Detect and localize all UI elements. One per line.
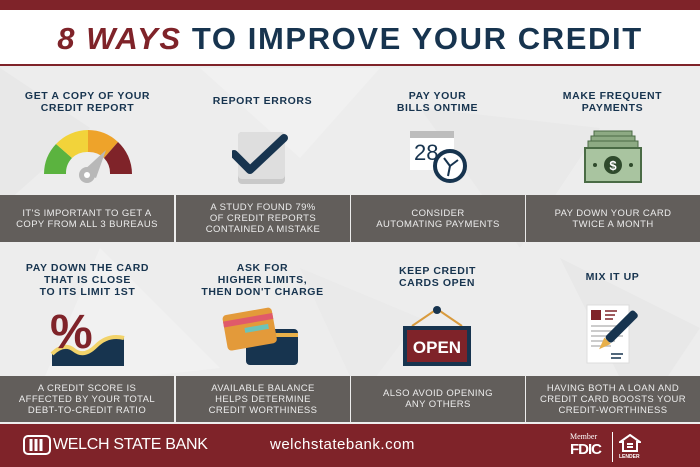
caption 8: CREDIT-WORTHINESS (558, 404, 668, 416)
icon: calendar clock (410, 131, 467, 183)
heading 5 (26, 262, 149, 298)
icon: percent chart (50, 308, 124, 366)
icon: calendar clock: 28 (414, 140, 438, 165)
heading 5: TO ITS LIMIT 1ST (40, 286, 135, 298)
caption 3 (351, 195, 525, 242)
title band (0, 10, 700, 66)
caption 2: CONTAINED A MISTAKE (206, 224, 320, 235)
heading 4 (563, 90, 662, 114)
caption 6: CREDIT WORTHINESS (209, 404, 317, 416)
caption 7 (351, 376, 525, 422)
icon: cash (584, 130, 642, 183)
caption 6 (176, 376, 350, 422)
icon: open sign (403, 306, 471, 366)
heading 8: MIX IT UP (586, 271, 639, 283)
caption 3: CONSIDER (411, 208, 465, 218)
logo: Welch State Bank: WELCH STATE BANK (53, 436, 208, 453)
caption 8: CREDIT CARD BOOSTS YOUR (540, 394, 686, 404)
icon: document pen (586, 304, 638, 364)
icon: credit cards (222, 308, 298, 365)
background pattern (0, 68, 700, 424)
heading 3: BILLS ONTIME (397, 102, 478, 114)
heading 7: CARDS OPEN (399, 277, 475, 289)
FDIC / equal housing: FDIC (570, 441, 601, 458)
caption 6: AVAILABLE BALANCE (211, 382, 315, 394)
title: 8 WAYS TO IMPROVE YOUR CREDIT (57, 21, 643, 56)
caption 5: AFFECTED BY YOUR TOTAL (19, 394, 155, 404)
caption 4 (526, 195, 700, 242)
top bar (0, 0, 700, 10)
icon: cash: $ (609, 158, 617, 173)
heading 1 (25, 90, 150, 114)
heading 5: THAT IS CLOSE (44, 274, 131, 286)
heading 2: REPORT ERRORS (213, 95, 312, 107)
heading 3 (397, 90, 478, 114)
caption 2 (176, 195, 350, 242)
caption 3: AUTOMATING PAYMENTS (376, 218, 500, 230)
caption 1: IT'S IMPORTANT TO GET A (22, 208, 152, 218)
caption 1: COPY FROM ALL 3 BUREAUS (16, 218, 158, 230)
caption 7: ANY OTHERS (405, 399, 471, 410)
caption 2: OF CREDIT REPORTS (210, 213, 316, 224)
heading 6: HIGHER LIMITS, (218, 274, 307, 286)
caption 5: A CREDIT SCORE IS (38, 382, 136, 394)
heading 6: ASK FOR (237, 262, 288, 274)
heading 4: MAKE FREQUENT (563, 90, 662, 102)
FDIC / equal housing: LENDER (619, 454, 640, 460)
heading 6 (201, 262, 324, 298)
heading 7: KEEP CREDIT (399, 265, 476, 277)
heading 6: THEN DON'T CHARGE (201, 286, 324, 298)
caption 8 (526, 376, 700, 422)
heading 1: GET A COPY OF YOUR (25, 90, 150, 102)
caption 2: A STUDY FOUND 79% (210, 202, 316, 213)
caption 1 (0, 195, 174, 242)
heading 3: PAY YOUR (409, 90, 466, 102)
caption 8: HAVING BOTH A LOAN AND (547, 382, 679, 394)
heading 1: CREDIT REPORT (41, 102, 134, 114)
icon: open sign: OPEN (413, 338, 461, 357)
heading 4: PAYMENTS (582, 102, 643, 114)
heading 7 (399, 265, 476, 289)
icon: gauge (44, 130, 132, 183)
caption 7: ALSO AVOID OPENING (383, 388, 493, 399)
caption 6: HELPS DETERMINE (215, 394, 311, 404)
FDIC / equal housing (570, 432, 641, 462)
caption 5: DEBT-TO-CREDIT RATIO (28, 404, 146, 416)
caption 5 (0, 376, 174, 422)
footer (0, 424, 700, 467)
heading 5: PAY DOWN THE CARD (26, 262, 149, 274)
caption 4: TWICE A MONTH (572, 218, 654, 230)
FDIC / equal housing: Member (570, 432, 597, 441)
icon: checkmark (232, 132, 288, 184)
caption 4: PAY DOWN YOUR CARD (555, 208, 671, 218)
website: welchstatebank.com (270, 436, 415, 453)
